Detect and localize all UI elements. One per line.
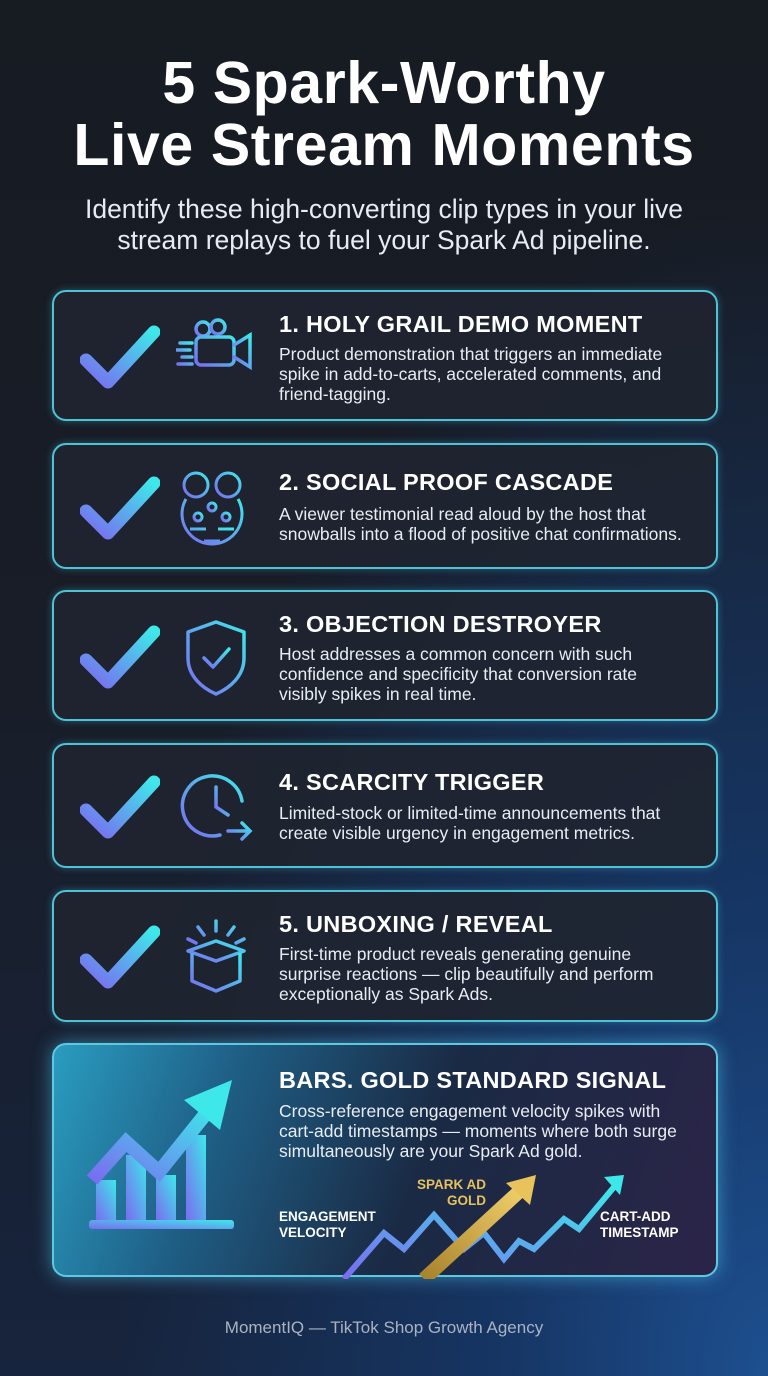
label: spark ad gold: GOLD xyxy=(447,1193,486,1208)
subtitle: Identify these high-converting clip types in your live xyxy=(85,194,683,224)
card 2 xyxy=(52,443,718,569)
icon: check xyxy=(80,326,160,388)
label: spark ad gold xyxy=(417,1177,486,1208)
title: Live Stream Moments xyxy=(73,112,695,178)
footer: MomentIQ — TikTok Shop Growth Agency xyxy=(225,1318,543,1337)
title: 5 Spark-Worthy xyxy=(162,50,606,116)
label: engagement velocity xyxy=(279,1209,376,1240)
icon: shield xyxy=(186,620,246,696)
subtitle xyxy=(85,194,683,255)
card 5: 5. UNBOXING / REVEAL xyxy=(279,911,553,937)
label: engagement velocity: VELOCITY xyxy=(279,1225,347,1240)
card 3: 3. OBJECTION DESTROYER xyxy=(279,611,602,637)
label: cart-add timestamp: TIMESTAMP xyxy=(600,1225,678,1240)
icon: box xyxy=(186,919,246,993)
icon: clock xyxy=(180,774,252,841)
icon: social chat xyxy=(180,472,244,546)
icon: video camera xyxy=(176,318,252,370)
icon: check xyxy=(80,476,160,540)
card 5: First-time product reveals generating genuine surprise reactions — clip beautifully and perform exceptionally as Spark Ads. xyxy=(279,944,653,1004)
panel: gold standard signal xyxy=(52,1043,718,1277)
card 1: Product demonstration that triggers an immediate spike in add-to-carts, accelerated comments, and friend-tagging. xyxy=(279,344,662,404)
panel: gold standard signal: Cross-reference engagement velocity spikes with cart-add timestamps — moments where both surge simultaneously are your Spark Ad gold. xyxy=(279,1101,677,1161)
chart: velocity lines xyxy=(342,1175,624,1279)
label: cart-add timestamp: CART-ADD xyxy=(600,1209,670,1224)
card 3 xyxy=(52,590,718,721)
icon: check xyxy=(80,926,160,988)
label: cart-add timestamp xyxy=(600,1209,678,1240)
icon: bar chart with arrow xyxy=(86,1080,234,1229)
card 3: Host addresses a common concern with such confidence and specificity that conversion rate visibly spikes in real time. xyxy=(279,644,637,704)
card 5 xyxy=(52,890,718,1022)
icon: check xyxy=(80,626,160,688)
panel: gold standard signal: BARS. GOLD STANDARD SIGNAL xyxy=(279,1067,666,1093)
card 1 xyxy=(52,290,718,421)
card 2: 2. SOCIAL PROOF CASCADE xyxy=(279,469,613,495)
label: engagement velocity: ENGAGEMENT xyxy=(279,1209,376,1224)
card 1: 1. HOLY GRAIL DEMO MOMENT xyxy=(279,311,643,337)
label: spark ad gold: SPARK AD xyxy=(417,1177,486,1192)
icon: check xyxy=(80,776,160,838)
card 4: 4. SCARCITY TRIGGER xyxy=(279,769,544,795)
card 4: Limited-stock or limited-time announcements that create visible urgency in engagement metrics. xyxy=(279,803,660,843)
card 4 xyxy=(52,743,718,868)
card 2: A viewer testimonial read aloud by the host that snowballs into a flood of positive chat confirmations. xyxy=(279,504,682,544)
title xyxy=(73,50,695,178)
subtitle: stream replays to fuel your Spark Ad pipeline. xyxy=(117,225,651,255)
